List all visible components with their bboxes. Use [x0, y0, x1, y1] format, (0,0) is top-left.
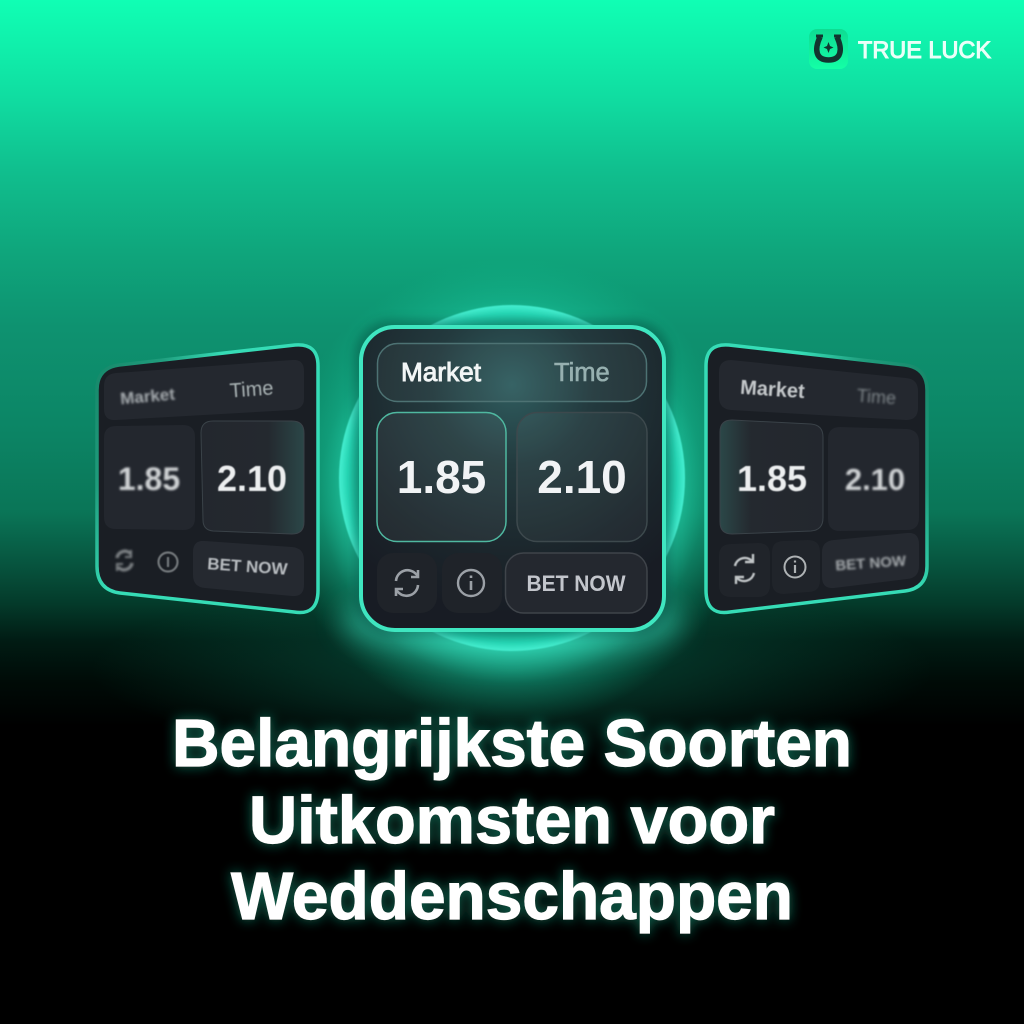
- left card: [97, 345, 318, 613]
- right bet now label: BET NOW: [835, 553, 907, 574]
- right tab bar: [719, 360, 918, 420]
- right label: Market: Market: [739, 377, 806, 403]
- right label: Time: Time: [856, 386, 897, 408]
- left bet now label: BET NOW: [207, 554, 289, 579]
- center odd box 1 (selected): [377, 412, 506, 542]
- left label: Market: Market: [119, 385, 176, 408]
- center odd value 2.10: 2.10: [537, 451, 627, 503]
- logo wordmark: TRUE LUCK: [858, 37, 991, 64]
- title: Uitkomsten voor: [249, 783, 775, 858]
- center bet now button: [506, 553, 647, 613]
- right odd box 2: [828, 427, 919, 531]
- center odd box 2: [517, 412, 647, 542]
- left odd value 2.10: 2.10: [217, 458, 287, 499]
- left label: Time: Time: [229, 378, 274, 403]
- center odd value 1.85: 1.85: [397, 451, 486, 503]
- right odd value 1.85: 1.85: [737, 458, 807, 499]
- left refresh icon: [117, 550, 132, 571]
- center info button: [442, 553, 502, 613]
- left card frame: [97, 345, 318, 613]
- center bet now label: BET NOW: [526, 571, 626, 596]
- right bet now button: [822, 533, 919, 588]
- title: Belangrijkste Soorten: [172, 706, 852, 781]
- title: Weddenschappen: [231, 859, 793, 934]
- logo: True Luck: [809, 29, 991, 69]
- right refresh button: [719, 543, 770, 597]
- center tab bar: [378, 344, 646, 402]
- center card frame: [361, 327, 664, 630]
- center card: [361, 327, 664, 630]
- center refresh button: [377, 553, 437, 613]
- left bet now button: [193, 541, 304, 596]
- center label: Market: Market: [401, 359, 481, 387]
- logo icon: horseshoe: [809, 29, 848, 69]
- right info button: [772, 540, 820, 594]
- glowing disc behind center card: [278, 258, 746, 726]
- left odd value 1.85: 1.85: [118, 461, 180, 497]
- left odd box 1: [104, 425, 195, 530]
- right odd value 2.10: 2.10: [845, 462, 905, 497]
- left tab bar: [104, 360, 304, 420]
- right card: [706, 345, 927, 613]
- right card frame: [706, 345, 927, 613]
- right odd box 1: [720, 420, 823, 534]
- title: [172, 706, 852, 934]
- left odd box 2: [201, 421, 304, 534]
- left info icon: [158, 552, 178, 572]
- center label: Time: Time: [554, 359, 610, 387]
